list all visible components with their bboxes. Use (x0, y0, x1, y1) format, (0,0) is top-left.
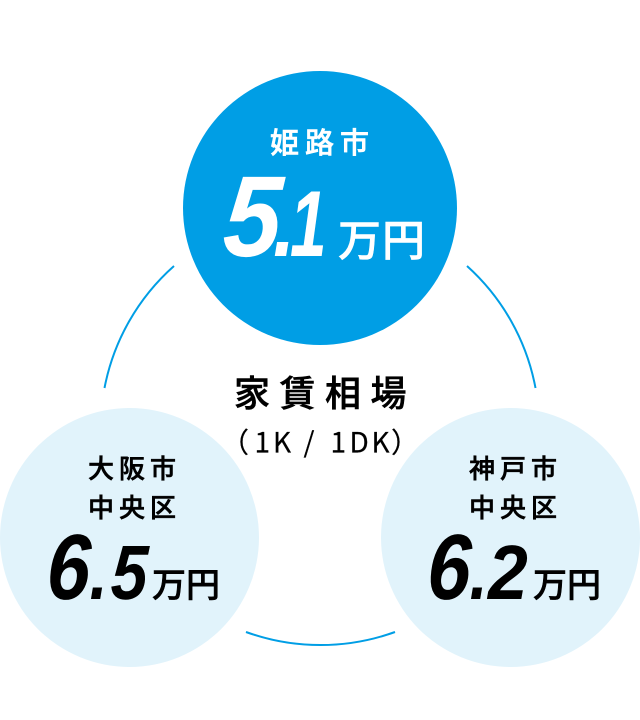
district label: Chuo-ku: 中央区 (88, 488, 181, 525)
unit: man-yen: 万円 (338, 207, 426, 269)
city label: Himeji: 姫路市 (270, 120, 375, 162)
value: 6.5: 6 (44, 516, 94, 620)
arc: connector left (104, 266, 174, 388)
value: 5.1: 5 (220, 153, 288, 281)
panel: Kobe Chuo (381, 408, 640, 667)
unit: man-yen: 万円 (533, 558, 601, 607)
city label: Kobe Chuo: 神戸市 (469, 449, 562, 486)
value: 6.2: 2 (486, 530, 528, 616)
value: 6.2: . (470, 530, 488, 616)
panel: Osaka Chuo (0, 408, 259, 667)
panel: Himeji (183, 71, 457, 345)
arc: connector right (467, 266, 536, 388)
value: 6.5: 5 (109, 530, 151, 616)
title: 家賃相場 (234, 365, 416, 417)
value: 6.2: 6 (425, 516, 475, 620)
subtitle: （1K/1DK） (221, 422, 419, 462)
value: 5.1: 1 (290, 173, 327, 277)
value: 6.5 (44, 516, 151, 620)
value: 5.1: . (273, 172, 295, 276)
city label: Osaka Chuo: 大阪市 (88, 449, 181, 486)
value: 5.1 (220, 153, 327, 281)
value: 6.5: . (90, 530, 108, 616)
arc: connector bottom (246, 632, 395, 645)
unit: man-yen: 万円 (152, 558, 220, 607)
district label: Chuo-ku: 中央区 (469, 488, 562, 525)
value: 6.2 (425, 516, 528, 620)
